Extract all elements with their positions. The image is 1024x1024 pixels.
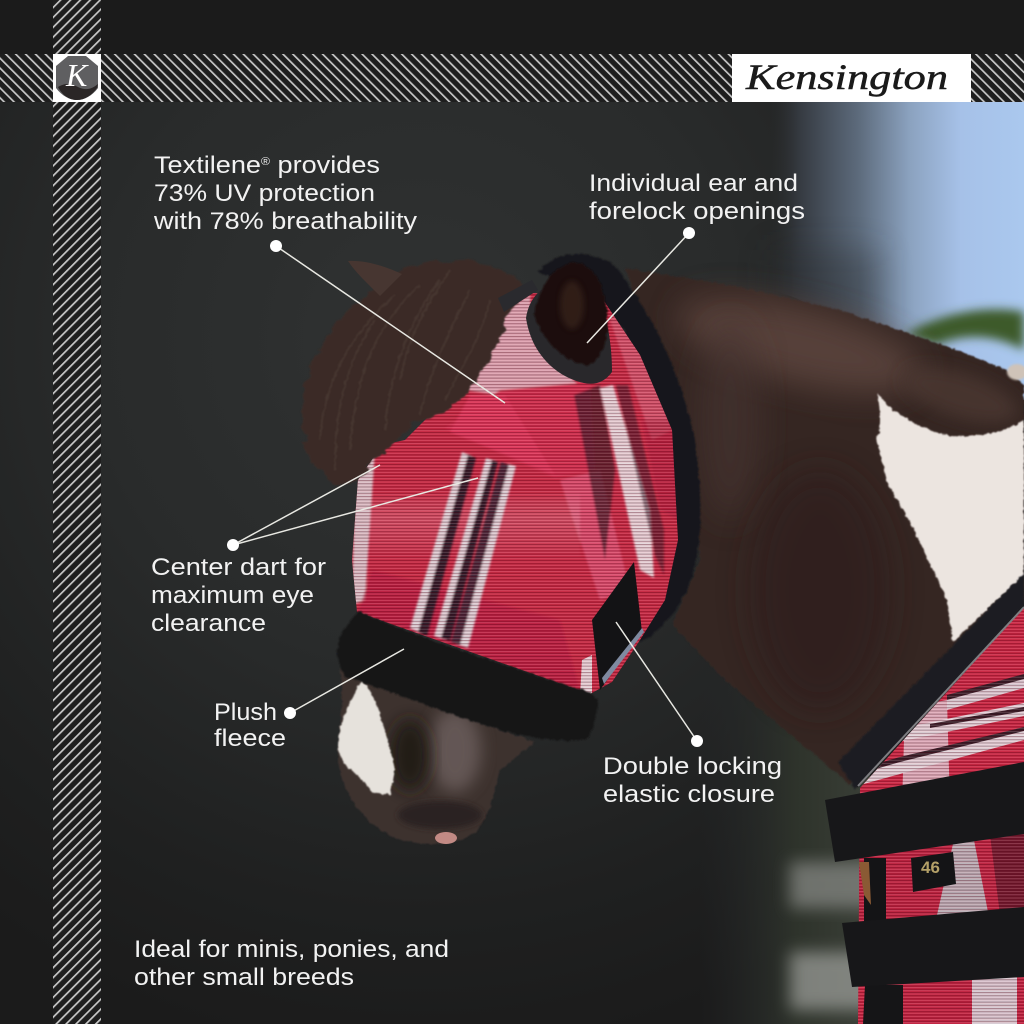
mask plaid and dart shading xyxy=(352,293,678,694)
muzzle xyxy=(338,668,535,844)
callout: plush fleece: Plush xyxy=(214,699,277,726)
callout: Textilene: with 78% breathability xyxy=(153,208,418,235)
horizontal diagonal-stripe band xyxy=(0,54,1024,102)
top dark strip over the photo xyxy=(0,0,1024,54)
nose fleece band xyxy=(338,611,598,741)
blanket xyxy=(825,573,1024,1024)
callout: double locking closure xyxy=(603,622,782,808)
brand logo: Kensington: Kensington xyxy=(745,57,948,97)
brand badge: K shield: K xyxy=(65,57,89,93)
ear opening trim xyxy=(526,281,612,384)
callout: plush fleece xyxy=(214,649,404,752)
size tag: 46 xyxy=(921,858,940,877)
lower vertical plaid stripes xyxy=(410,452,516,648)
callout: center dart xyxy=(151,465,478,637)
strap two xyxy=(842,907,1024,987)
callout: Textilene: provides xyxy=(270,152,380,179)
blanket plaid xyxy=(858,607,1024,1024)
callout: Textilene: ® xyxy=(261,156,270,168)
nose tip xyxy=(435,832,457,844)
callout: center dart: clearance xyxy=(151,610,266,637)
brand badge: K shield xyxy=(53,54,101,102)
poll fleece trim xyxy=(538,254,701,642)
blanket neck trim xyxy=(838,573,1024,790)
footer note: Ideal for minis, ponies, and xyxy=(134,936,449,963)
callout: ear and forelock openings: forelock openings xyxy=(589,198,805,225)
footer note: other small breeds xyxy=(134,964,354,991)
horse neck xyxy=(625,268,1024,785)
callout: double locking closure: elastic closure xyxy=(603,781,775,808)
callout: Textilene: 73% UV protection xyxy=(154,180,375,207)
callout: ear and forelock openings xyxy=(587,170,805,343)
side closure tab xyxy=(592,562,644,690)
background photo: blurred sky and foliage xyxy=(744,102,1024,1024)
strap one xyxy=(825,762,1024,862)
callout: center dart: maximum eye xyxy=(151,582,314,609)
forelock-side ear xyxy=(348,261,402,296)
plaid below the first strap xyxy=(858,830,1024,920)
neck fur shading xyxy=(670,278,1024,710)
fly mask mesh xyxy=(352,293,678,694)
white tuft on the withers xyxy=(1007,364,1024,380)
ear xyxy=(534,263,608,365)
callout: Textilene xyxy=(153,152,505,403)
callout: Textilene: Textilene xyxy=(154,152,261,179)
vertical diagonal-stripe band xyxy=(53,0,101,1024)
lower dark lining xyxy=(864,858,886,925)
callout: plush fleece: fleece xyxy=(214,725,286,752)
footer note xyxy=(134,936,449,991)
forelock hair xyxy=(302,261,524,488)
forelock strands xyxy=(320,270,490,470)
muzzle shading xyxy=(390,708,482,829)
white coat patch xyxy=(877,393,1024,642)
mask top binding xyxy=(498,280,538,312)
callout: double locking closure: Double locking xyxy=(603,753,782,780)
white blaze xyxy=(338,680,395,795)
size tag xyxy=(911,852,956,892)
callout: ear and forelock openings: Individual ear and xyxy=(589,170,798,197)
brand logo: Kensington xyxy=(732,54,971,102)
callout: center dart: Center dart for xyxy=(151,554,326,581)
